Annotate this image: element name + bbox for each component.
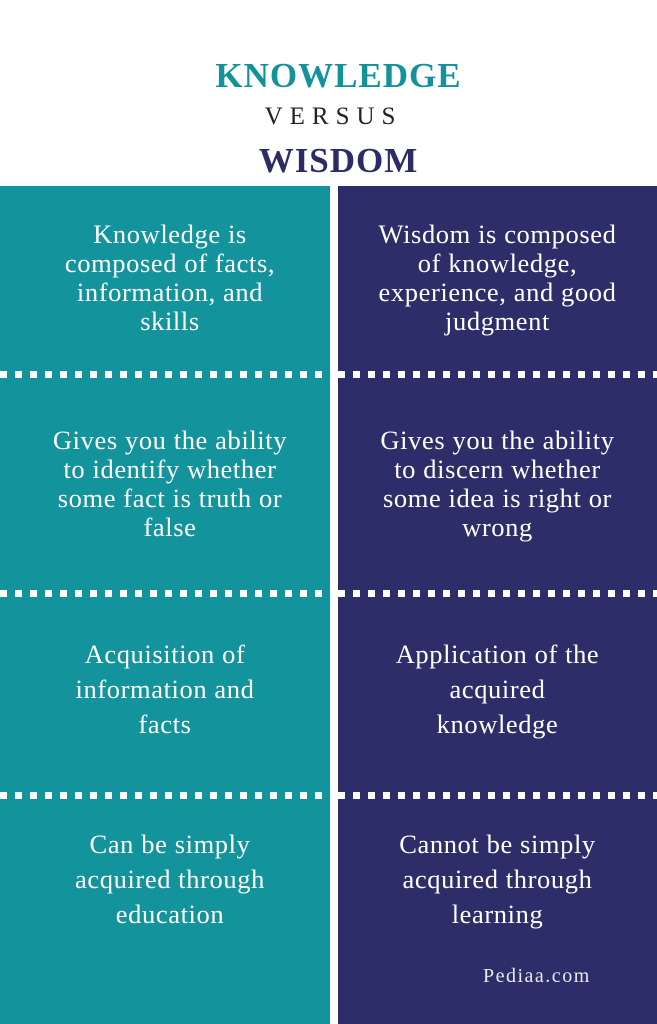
text: knowledge row 2	[53, 425, 287, 542]
text: wisdom row 3	[396, 639, 599, 739]
text: knowledge row 4: education	[116, 899, 224, 929]
text: wisdom row 4: acquired through	[403, 864, 592, 894]
logo: pediaa.com: Pediaa.com	[483, 965, 591, 987]
text: knowledge row 2: Gives you the ability	[53, 425, 287, 455]
text: knowledge row 4: acquired through	[75, 864, 265, 894]
text: wisdom row 2: Gives you the ability	[380, 425, 615, 455]
text: knowledge row 3: facts	[138, 709, 192, 739]
text: knowledge row 4	[75, 829, 265, 929]
text: wisdom row 1: Wisdom is composed	[379, 219, 616, 249]
text: knowledge row 2: some fact is truth or	[58, 483, 282, 513]
text: knowledge row 1: information, and	[77, 277, 263, 307]
heading: knowledge: KNOWLEDGE	[215, 56, 462, 95]
text: wisdom row 1	[378, 219, 616, 336]
text: wisdom row 4: Cannot be simply	[399, 829, 596, 859]
text: knowledge row 3: Acquisition of	[85, 639, 245, 669]
text: wisdom row 4: learning	[452, 899, 543, 929]
text: knowledge row 3: information and	[76, 674, 254, 704]
text: knowledge row 2: false	[143, 512, 197, 542]
text: knowledge row 4: Can be simply	[90, 829, 250, 859]
text: wisdom row 4	[399, 829, 596, 929]
text: wisdom row 3: knowledge	[437, 709, 558, 739]
text: wisdom row 2: some idea is right or	[383, 483, 612, 513]
text: wisdom row 2: wrong	[462, 512, 533, 542]
heading: versus: VERSUS	[265, 103, 402, 130]
title	[215, 56, 462, 180]
text: knowledge row 1	[65, 219, 275, 336]
panel: knowledge column	[0, 186, 330, 1024]
text: wisdom row 1: judgment	[445, 306, 550, 336]
text: wisdom row 2: to discern whether	[394, 454, 601, 484]
text: knowledge row 1: skills	[140, 306, 200, 336]
text: wisdom row 1: of knowledge,	[418, 248, 577, 278]
heading: wisdom: WISDOM	[259, 141, 418, 180]
panel: wisdom column	[338, 186, 657, 1024]
text: wisdom row 3: acquired	[449, 674, 546, 704]
text: knowledge row 3	[76, 639, 254, 739]
text: wisdom row 1: experience, and good	[379, 277, 616, 307]
text: knowledge row 1: composed of facts,	[65, 248, 275, 278]
text: knowledge row 2: to identify whether	[63, 454, 277, 484]
text: knowledge row 1: Knowledge is	[93, 219, 247, 249]
text: wisdom row 2	[380, 425, 615, 542]
text: wisdom row 3: Application of the	[396, 639, 599, 669]
